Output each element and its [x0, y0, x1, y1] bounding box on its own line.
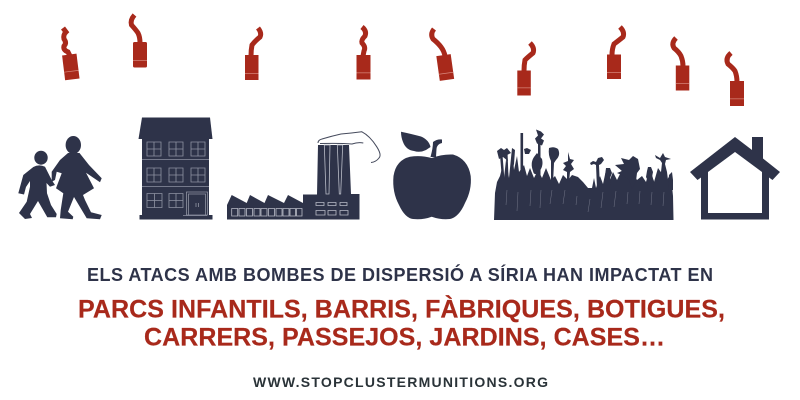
- icon: factory with smoke: [227, 132, 380, 220]
- website footer: WWW.STOPCLUSTERMUNITIONS.ORG: [253, 374, 548, 390]
- bomb 8: [673, 38, 689, 90]
- bomb 3: [245, 28, 261, 80]
- red list of places: [78, 294, 725, 352]
- bomb 4: [356, 27, 370, 80]
- grass highlights: [506, 190, 664, 212]
- icon: apartment building: [138, 118, 212, 220]
- dense vegetation mass: [494, 148, 674, 220]
- icon: garden silhouette with flowers: [494, 130, 674, 220]
- bomb 1: [62, 28, 80, 80]
- bomb 6: [517, 43, 534, 96]
- red list of places: PARCS INFANTILS, BARRIS, FÀBRIQUES, BOTIGUES,: [78, 294, 725, 324]
- bomb 2: [131, 15, 147, 68]
- icon: children walking hand in hand: [18, 136, 102, 219]
- bomb 5: [432, 29, 454, 81]
- bomblets row: [62, 15, 744, 106]
- flower heads and stalks: [497, 148, 511, 161]
- smoke: [318, 132, 380, 162]
- bomb 7: [607, 27, 624, 79]
- bomb 9: [727, 53, 744, 106]
- red list of places: CARRERS, PASSEJOS, JARDINS, CASES…: [144, 324, 665, 352]
- icon: apple: [393, 132, 471, 219]
- heading: ELS ATACS AMB BOMBES DE DISPERSIÓ A SÍRIA HAN IMPACTAT EN: [87, 264, 713, 285]
- icon: house: [690, 137, 780, 220]
